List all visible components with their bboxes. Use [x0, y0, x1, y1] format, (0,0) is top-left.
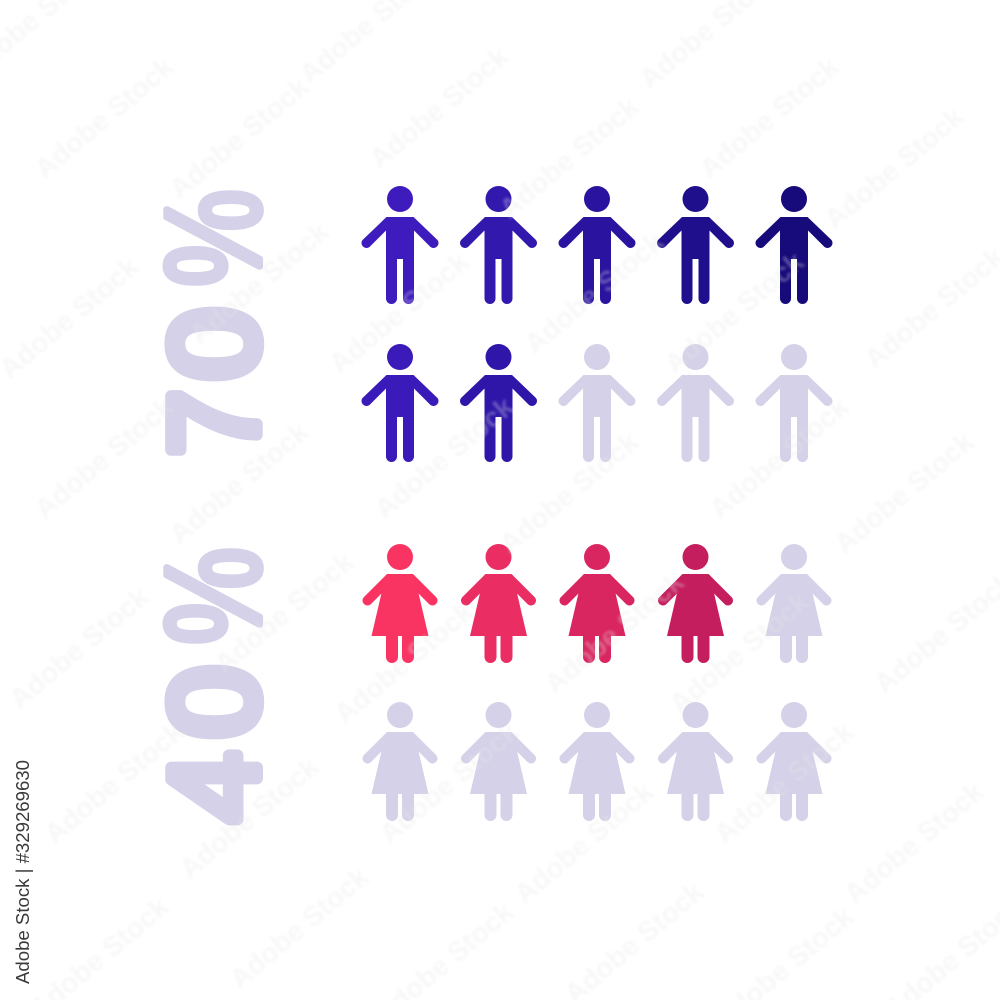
watermark overlay: Adobe Stock [28, 51, 180, 185]
woman 9 muted [658, 702, 733, 821]
pictogram: women, 40 percent filled [362, 544, 832, 821]
watermark overlay: Adobe Stock [508, 776, 660, 910]
label: 40% rotated [139, 547, 289, 822]
watermark overlay: Adobe Stock [323, 246, 475, 380]
woman 10 muted [756, 702, 832, 821]
man 7 [460, 344, 537, 462]
man 8 muted [558, 344, 636, 462]
woman 1 [362, 544, 438, 663]
label: 40% rotated: % [139, 547, 289, 645]
watermark overlay: Adobe Stock [493, 91, 645, 225]
watermark overlay: Adobe Stock [373, 716, 525, 850]
woman 8 muted [560, 702, 634, 821]
woman 5 muted [756, 544, 832, 663]
woman 6 muted [362, 702, 438, 821]
man 4 [657, 186, 734, 304]
watermark overlay: Adobe Stock [703, 391, 855, 525]
woman 3 [560, 544, 634, 663]
watermark overlay: Adobe Stock [838, 776, 990, 910]
label: 70% rotated [139, 189, 289, 456]
watermark overlay: Adobe Stock [173, 751, 325, 885]
watermark overlay: Adobe Stock [28, 391, 180, 525]
man 6 [362, 344, 438, 462]
stock id caption: Adobe Stock | #329269630 [13, 760, 33, 984]
watermark overlay: Adobe Stock [538, 566, 690, 700]
watermark overlay: Adobe Stock [828, 426, 980, 560]
watermark overlay: Adobe Stock [363, 41, 515, 175]
watermark overlay: Adobe Stock [693, 51, 845, 185]
watermark overlay: Adobe Stock [38, 716, 190, 850]
woman 4 [658, 544, 733, 663]
woman 2 [461, 544, 536, 663]
watermark overlay: Adobe Stock [493, 426, 645, 560]
watermark overlay: Adobe Stock [3, 581, 155, 715]
watermark overlay: Adobe Stock [658, 246, 810, 380]
label: 70% rotated: 0 [145, 308, 283, 380]
man 3 [558, 186, 636, 304]
label: 40% rotated: 0 [145, 666, 283, 738]
man 1 [362, 186, 438, 304]
watermark overlay: Adobe Stock [663, 586, 815, 720]
label: 70% rotated: % [139, 189, 289, 287]
watermark overlay: Adobe Stock [818, 101, 970, 235]
man 5 [756, 186, 832, 304]
label: 40% rotated: 4 [145, 752, 284, 822]
watermark overlay: Adobe Stock [368, 391, 520, 525]
watermark overlay: Adobe Stock [183, 216, 335, 350]
watermark overlay: Adobe Stock [708, 716, 860, 850]
watermark overlay: Adobe Stock [328, 596, 480, 730]
watermark overlay: Adobe Stock [163, 71, 315, 205]
man 2 [460, 186, 537, 304]
watermark overlay: Adobe Stock [163, 416, 315, 550]
pictogram: men, 70 percent filled [362, 186, 832, 462]
man 10 muted [756, 344, 832, 462]
woman 7 muted [461, 702, 536, 821]
label: 70% rotated: 7 [145, 390, 284, 456]
watermark overlay: Adobe Stock [208, 546, 360, 680]
watermark overlay: Adobe Stock [518, 226, 670, 360]
man 9 muted [657, 344, 734, 462]
watermark overlay: Adobe Stock [223, 861, 375, 995]
